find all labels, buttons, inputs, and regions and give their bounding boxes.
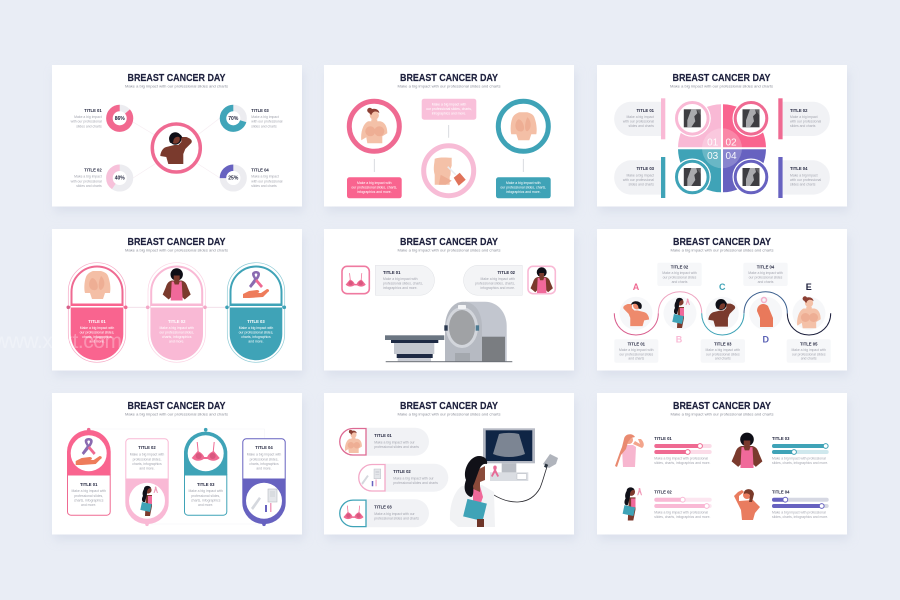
connector lines — [374, 125, 523, 172]
heading: BREAST CANCER DAY — [128, 73, 226, 84]
illustration: ultrasound monitor — [483, 428, 535, 481]
item: title 03: professional slides and charts — [374, 516, 419, 520]
text pill: title 02: TITLE 02 — [498, 270, 516, 275]
text block: title 02 — [71, 168, 102, 188]
card 01: Make a big impact with — [71, 489, 106, 493]
card 04 — [242, 439, 286, 526]
arch card: light pink — [148, 263, 205, 362]
text box: title 04: Make a big impact with — [748, 271, 783, 275]
text box: title 03: Make a big impact with — [706, 348, 740, 352]
card 01: professional slides, — [74, 494, 103, 498]
step numbers — [707, 138, 737, 162]
text box: title 01 — [614, 339, 658, 363]
progress block: title 03: slides, charts, infographics and more. — [772, 461, 828, 465]
text block: title 01: slides and charts — [629, 124, 654, 128]
text block: title 02: TITLE 02 — [84, 168, 102, 172]
text box: title 05 — [787, 339, 831, 363]
step numbers: 01 — [707, 138, 719, 148]
text block: title 01: with our professional — [71, 120, 102, 124]
progress block: title 01: slides, charts, infographics and more. — [654, 461, 711, 465]
progress block: title 04: TITLE 04 — [772, 490, 790, 494]
progress block: title 03 — [772, 436, 829, 465]
figure: light woman — [797, 296, 821, 328]
text box: title 02: TITLE 02 — [671, 264, 689, 270]
card 01: charts, infographics — [74, 498, 104, 502]
step letters: A — [633, 282, 640, 292]
text block: title 02: with our professional — [790, 120, 821, 124]
donut chart: 25%: 25% — [228, 176, 239, 182]
arch card: teal: and more. — [248, 340, 264, 344]
callout: bottom right — [496, 177, 551, 198]
text block: title 04: with our professional — [251, 179, 283, 183]
side pills — [614, 102, 830, 195]
icon circle: woman front view — [349, 101, 399, 151]
arch card: pink: charts, infographics — [82, 335, 112, 339]
arch card: pink: and more. — [89, 340, 105, 344]
arch card: light pink: Make a big impact with — [159, 326, 194, 330]
text block: title 03: slides and charts — [629, 182, 654, 186]
item: title 01: Make a big impact with our — [374, 440, 415, 444]
illustration: probe and cable — [493, 454, 558, 502]
text block: title 03 — [251, 108, 283, 128]
arch card: teal: our professional slides, — [239, 330, 273, 334]
progress block: title 04 — [772, 490, 829, 519]
text box: title 03: and charts — [715, 357, 731, 361]
text block: title 02 — [790, 108, 821, 128]
text block: title 02: slides and charts — [76, 184, 102, 188]
illustration: MRI machine — [385, 302, 512, 362]
text block: title 02: Make a big impact — [790, 115, 818, 119]
heading: BREAST CANCER DAY — [128, 237, 226, 248]
text block: title 04: with our professional — [790, 178, 821, 182]
heading: BREAST CANCER DAY — [400, 73, 498, 84]
arch card: light pink: and more. — [169, 340, 184, 344]
progress block: title 04: Make a big impact with professional — [772, 510, 826, 514]
text block: title 04: slides and charts — [251, 184, 277, 188]
figure: profile woman — [672, 298, 690, 328]
panel: ultrasound slide — [324, 393, 576, 540]
text pill: title 01: professional slides, charts, — [383, 282, 423, 286]
connector lines — [133, 118, 220, 178]
arch card: teal — [227, 263, 285, 362]
progress block: title 02: TITLE 02 — [654, 490, 672, 494]
callout: bottom left — [347, 177, 402, 198]
quadrant circle — [678, 104, 766, 192]
subheading: Make a big impact with our professional slides and charts — [670, 248, 774, 252]
item: title 02: Make a big impact with our — [393, 476, 434, 480]
item: title 01: TITLE 01 — [374, 433, 392, 438]
card 01: and more. — [81, 503, 96, 507]
panel: three circles slide — [324, 65, 576, 212]
text box: title 01: our professional slides — [619, 352, 653, 356]
progress block: title 03: TITLE 03 — [772, 436, 790, 441]
item: title 01: professional slides and charts — [374, 445, 419, 449]
donut chart: 25% — [223, 168, 244, 188]
subheading: Make a big impact with our professional slides and charts — [125, 84, 228, 88]
figure: salmon woman — [623, 301, 649, 326]
heading: BREAST CANCER DAY — [400, 237, 498, 248]
text block: title 01: with our professional — [623, 120, 654, 124]
text box: title 04: TITLE 04 — [757, 264, 775, 270]
step letters: C — [719, 282, 726, 292]
subheading: Make a big impact with our professional slides and charts — [398, 84, 501, 88]
text box: title 05: and charts — [801, 357, 817, 361]
text block: title 04 — [251, 168, 283, 188]
panel: arches slide — [52, 229, 304, 376]
text block: title 03 — [623, 166, 655, 186]
text block: title 03: with our professional — [251, 120, 283, 124]
text block: title 03: TITLE 03 — [251, 108, 269, 113]
step letters — [633, 282, 812, 344]
card 02: charts, infographics — [132, 462, 162, 466]
callout: top pink: our professional slides, charts, — [426, 107, 472, 111]
card 02 — [125, 439, 169, 526]
text block: title 03: TITLE 03 — [637, 166, 655, 171]
subheading: Make a big impact with our professional slides and charts — [670, 84, 773, 88]
donut chart: 86% — [109, 108, 130, 129]
callout: bottom left: our professional slides, charts, — [351, 186, 397, 190]
text box: title 04: and charts — [758, 280, 774, 284]
text box: title 02: and charts — [672, 280, 688, 284]
text block: title 02: TITLE 02 — [790, 108, 808, 113]
donut chart: 40% — [109, 168, 130, 188]
step numbers: 02 — [725, 138, 737, 148]
progress block: title 03: Make a big impact with professional — [772, 456, 826, 460]
text pill: title 02: professional slides, charts, — [475, 282, 515, 286]
panel: progress bars slide — [597, 393, 849, 540]
text block: title 04: Make a big impact — [790, 174, 818, 178]
callout: bottom left: Make a big impact with — [357, 181, 392, 185]
step numbers: 03 — [707, 151, 719, 162]
text box: title 05: Make a big impact with — [791, 348, 826, 352]
callout: top pink: infographics and more. — [432, 112, 466, 116]
icon circle: self test — [424, 146, 474, 196]
icon circle: back view — [498, 101, 548, 151]
card 03: Make a big impact with — [188, 489, 223, 493]
card 03: charts, infographics — [191, 498, 221, 502]
arch card: pink: our professional slides, — [80, 330, 114, 334]
text box: title 01: TITLE 01 — [628, 342, 646, 346]
text block: title 02: Make a big impact — [74, 175, 102, 179]
text block: title 01: Make a big impact — [74, 115, 102, 119]
item: title 01 — [340, 428, 429, 456]
progress block: title 02: slides, charts, infographics and more. — [654, 515, 711, 519]
figure: doctor profile — [623, 487, 642, 520]
callout: bottom right: our professional slides, charts, — [500, 186, 546, 190]
arch card: pink — [68, 263, 126, 362]
donut chart: 70%: 70% — [228, 116, 239, 122]
icon: x-ray 01 — [674, 100, 711, 137]
text box: title 02 — [657, 263, 702, 286]
card 01: TITLE 01 — [80, 482, 98, 487]
card 02: Make a big impact with — [130, 452, 164, 456]
step letters: D — [762, 334, 769, 344]
text box: title 03: our professional slides — [706, 352, 740, 356]
step background circles — [620, 297, 826, 330]
text box: title 01: and charts — [628, 357, 645, 361]
card 03: professional slides, — [191, 494, 220, 498]
step letters: E — [806, 282, 812, 292]
text block: title 04 — [790, 166, 821, 186]
donut chart: 86%: 86% — [115, 116, 125, 122]
text block: title 02: slides and charts — [790, 124, 816, 128]
icon box: bra — [342, 266, 369, 294]
arch card: teal: Make a big impact with — [239, 326, 273, 330]
progress block: title 02: Make a big impact with professional — [654, 510, 708, 514]
wave line — [614, 292, 831, 335]
progress block: title 04: slides, charts, infographics and more. — [772, 515, 828, 519]
text pill: title 01 — [375, 265, 434, 295]
text block: title 01 — [71, 108, 102, 128]
text pill: title 01: Make a big impact with — [383, 277, 418, 281]
connector lines — [89, 429, 264, 524]
connector dots — [66, 306, 286, 309]
card 01 — [67, 428, 111, 515]
text pill: title 02: Make a big impact with — [480, 277, 515, 281]
item: title 03: Make a big impact with our — [374, 512, 415, 516]
text box: title 03: TITLE 03 — [714, 342, 732, 346]
text pill: title 01: TITLE 01 — [383, 270, 401, 275]
card 02: TITLE 02 — [138, 445, 156, 450]
text box: title 02: our professional slides — [663, 276, 697, 280]
heading: BREAST CANCER DAY — [128, 401, 226, 412]
subheading: Make a big impact with our professional slides and charts — [670, 412, 774, 416]
card 04: Make a big impact with — [247, 452, 281, 456]
icon: woman checking breast in pink ring — [152, 124, 200, 172]
heading: BREAST CANCER DAY — [672, 73, 771, 84]
callout: top pink — [422, 99, 476, 120]
icon: x-ray 04 — [732, 158, 770, 196]
text box: title 05: TITLE 05 — [800, 342, 818, 346]
text box: title 01: Make a big impact with — [619, 348, 654, 352]
illustration: doctor — [450, 456, 495, 527]
subheading: Make a big impact with our professional slides and charts — [125, 412, 228, 416]
text box: title 02: Make a big impact with — [662, 271, 697, 275]
figure: dark woman tank top — [732, 433, 762, 468]
text box: title 04: our professional slides — [749, 276, 783, 280]
text block: title 03: slides and charts — [251, 124, 277, 128]
panel: wave timeline slide — [597, 229, 849, 376]
text box: title 04 — [743, 263, 788, 286]
heading: BREAST CANCER DAY — [673, 237, 771, 248]
donut chart: 40%: 40% — [115, 176, 125, 182]
item: title 02: TITLE 02 — [393, 469, 411, 474]
text block: title 01 — [623, 108, 655, 128]
card 02: professional slides, — [133, 458, 161, 462]
text block: title 04: Make a big impact — [251, 175, 279, 179]
card 02: and more. — [139, 466, 155, 470]
card 04: professional slides, — [250, 458, 278, 462]
text block: title 01: slides and charts — [76, 124, 102, 128]
panel: x-ray quadrant slide — [597, 65, 849, 212]
arch card: teal: TITLE 03 — [247, 319, 265, 324]
text box: title 05: our professional slides — [792, 352, 826, 356]
icon: x-ray 02 — [732, 100, 770, 137]
item: title 02: professional slides and charts — [393, 481, 438, 485]
figure: salmon woman — [734, 489, 760, 520]
step numbers: 04 — [725, 151, 737, 162]
heading: BREAST CANCER DAY — [400, 401, 498, 412]
subheading: Make a big impact with our professional slides and charts — [125, 248, 228, 252]
subheading: Make a big impact with our professional slides and charts — [398, 248, 501, 252]
callout: bottom right: infographics and more. — [506, 190, 541, 194]
text pill: title 01: infographics and more. — [383, 286, 418, 290]
subheading: Make a big impact with our professional slides and charts — [398, 412, 501, 416]
progress block: title 01: Make a big impact with professional — [654, 456, 708, 460]
card 03 — [184, 428, 227, 515]
item: title 02 — [359, 464, 448, 492]
text block: title 01: TITLE 01 — [84, 108, 102, 113]
card 04: TITLE 04 — [255, 445, 273, 450]
callout: bottom left: infographics and more. — [357, 190, 392, 194]
text block: title 02: with our professional — [71, 179, 102, 183]
card 04: and more. — [256, 466, 272, 470]
arch card: pink: TITLE 01 — [88, 319, 106, 324]
panel: four staggered cards slide — [52, 393, 304, 540]
side bars — [661, 98, 783, 198]
text block: title 03: Make a big impact — [626, 174, 654, 178]
progress block: title 02 — [654, 490, 712, 519]
panel: MRI scanner slide — [324, 229, 576, 376]
figure: dark woman — [708, 299, 735, 327]
text pill: title 02 — [464, 265, 522, 295]
progress block: title 01: TITLE 01 — [654, 436, 672, 441]
text pill: title 02: infographics and more. — [480, 286, 515, 290]
text box: title 03 — [701, 339, 745, 363]
icon: x-ray 03 — [674, 158, 711, 196]
callout: top pink: Make a big impact with — [432, 102, 466, 106]
text block: title 04: TITLE 04 — [251, 168, 269, 172]
callout: bottom right: Make a big impact with — [506, 181, 541, 185]
figure: hand with ring — [757, 298, 773, 327]
card 03: and more. — [198, 503, 213, 507]
progress block: title 01 — [654, 436, 712, 465]
card 03: TITLE 03 — [197, 482, 215, 487]
donut chart: 70% — [223, 108, 244, 129]
figure: lady with raised arm — [615, 434, 644, 467]
step letters: B — [676, 334, 683, 344]
arch card: teal: charts, infographics — [241, 335, 271, 339]
text block: title 01: TITLE 01 — [637, 108, 655, 113]
text block: title 01: Make a big impact — [626, 115, 654, 119]
text block: title 03: with our professional — [623, 178, 654, 182]
item: title 03 — [340, 499, 429, 527]
icon box: woman — [528, 266, 555, 294]
text block: title 04: slides and charts — [790, 182, 816, 186]
arch card: light pink: charts, infographics — [162, 335, 192, 339]
arch card: pink: Make a big impact with — [80, 326, 114, 330]
arch card: light pink: TITLE 02 — [168, 319, 186, 324]
card 04: charts, infographics — [249, 462, 279, 466]
text block: title 04: TITLE 04 — [790, 166, 808, 171]
panel: donut percentages slide — [52, 65, 304, 212]
connector line — [68, 306, 285, 308]
item: title 03: TITLE 03 — [374, 504, 392, 510]
heading: BREAST CANCER DAY — [673, 401, 771, 412]
arch card: light pink: our professional slides, — [159, 330, 194, 334]
text block: title 03: Make a big impact — [251, 115, 279, 119]
